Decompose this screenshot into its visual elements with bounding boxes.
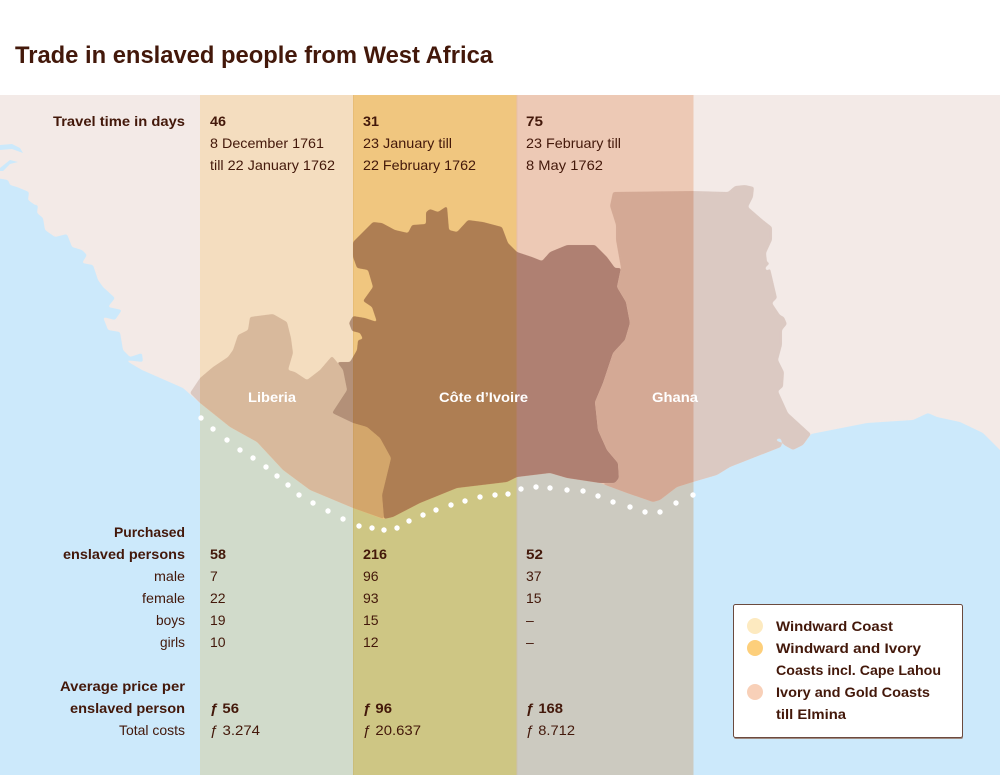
table: purchased enslaved persons: girls bbox=[160, 634, 185, 650]
legend: Ivory and Gold Coasts bbox=[776, 684, 930, 700]
table: purchased enslaved persons: 93 bbox=[363, 590, 379, 606]
table: purchased enslaved persons: 216 bbox=[363, 546, 387, 562]
legend: Windward Coast bbox=[776, 618, 893, 634]
table: prices and costs bbox=[60, 678, 575, 738]
table: purchased enslaved persons: Purchased bbox=[114, 524, 185, 540]
country labels: Côte d’Ivoire bbox=[439, 389, 528, 405]
table: purchased enslaved persons: – bbox=[526, 634, 534, 650]
row: travel time: 22 February 1762 bbox=[363, 157, 476, 173]
table: purchased enslaved persons: 22 bbox=[210, 590, 226, 606]
table: purchased enslaved persons: 58 bbox=[210, 546, 226, 562]
table: purchased enslaved persons: 37 bbox=[526, 568, 542, 584]
row: travel time: 75 bbox=[526, 113, 543, 129]
legend: Windward and Ivory bbox=[776, 640, 921, 656]
table: purchased enslaved persons bbox=[63, 524, 543, 650]
row: travel time: 23 January till bbox=[363, 135, 452, 151]
table: prices and costs: ƒ 56 bbox=[210, 700, 239, 716]
table: purchased enslaved persons: boys bbox=[156, 612, 185, 628]
band: Ivory and Gold Coasts bbox=[516, 95, 694, 775]
country labels bbox=[248, 389, 698, 405]
table: prices and costs: enslaved person bbox=[70, 700, 185, 716]
table: purchased enslaved persons: enslaved persons bbox=[63, 546, 185, 562]
table: purchased enslaved persons: 15 bbox=[526, 590, 542, 606]
row: travel time: Travel time in days bbox=[53, 113, 185, 129]
table: prices and costs: ƒ 168 bbox=[526, 700, 563, 716]
legend bbox=[734, 604, 963, 739]
row: travel time: 46 bbox=[210, 113, 226, 129]
dotted route line bbox=[198, 415, 696, 533]
row: travel time: 8 December 1761 bbox=[210, 135, 324, 151]
table: prices and costs: ƒ 20.637 bbox=[363, 722, 421, 738]
legend: till Elmina bbox=[776, 706, 846, 722]
table: purchased enslaved persons: male bbox=[154, 568, 185, 584]
table: purchased enslaved persons: female bbox=[142, 590, 185, 606]
table: prices and costs: Average price per bbox=[60, 678, 186, 694]
table: purchased enslaved persons: 96 bbox=[363, 568, 379, 584]
table: purchased enslaved persons: 15 bbox=[363, 612, 379, 628]
row: travel time: till 22 January 1762 bbox=[210, 157, 335, 173]
title: Trade in enslaved people from West Africa bbox=[15, 42, 494, 69]
band: Windward Coast bbox=[200, 95, 353, 775]
table: purchased enslaved persons: 52 bbox=[526, 546, 543, 562]
table: prices and costs: ƒ 3.274 bbox=[210, 722, 260, 738]
legend: Coasts incl. Cape Lahou bbox=[776, 662, 941, 678]
table: purchased enslaved persons: 10 bbox=[210, 634, 226, 650]
band: Windward and Ivory Coasts bbox=[353, 95, 516, 775]
row: travel time: 31 bbox=[363, 113, 379, 129]
row: travel time bbox=[53, 113, 621, 173]
table: purchased enslaved persons: 12 bbox=[363, 634, 379, 650]
table: prices and costs: ƒ 96 bbox=[363, 700, 392, 716]
row: travel time: 8 May 1762 bbox=[526, 157, 603, 173]
country labels: Liberia bbox=[248, 389, 296, 405]
table: prices and costs: Total costs bbox=[119, 722, 185, 738]
country labels: Ghana bbox=[652, 389, 698, 405]
row: travel time: 23 February till bbox=[526, 135, 621, 151]
table: purchased enslaved persons: 7 bbox=[210, 568, 218, 584]
table: purchased enslaved persons: 19 bbox=[210, 612, 226, 628]
table: prices and costs: ƒ 8.712 bbox=[526, 722, 575, 738]
table: purchased enslaved persons: – bbox=[526, 612, 534, 628]
